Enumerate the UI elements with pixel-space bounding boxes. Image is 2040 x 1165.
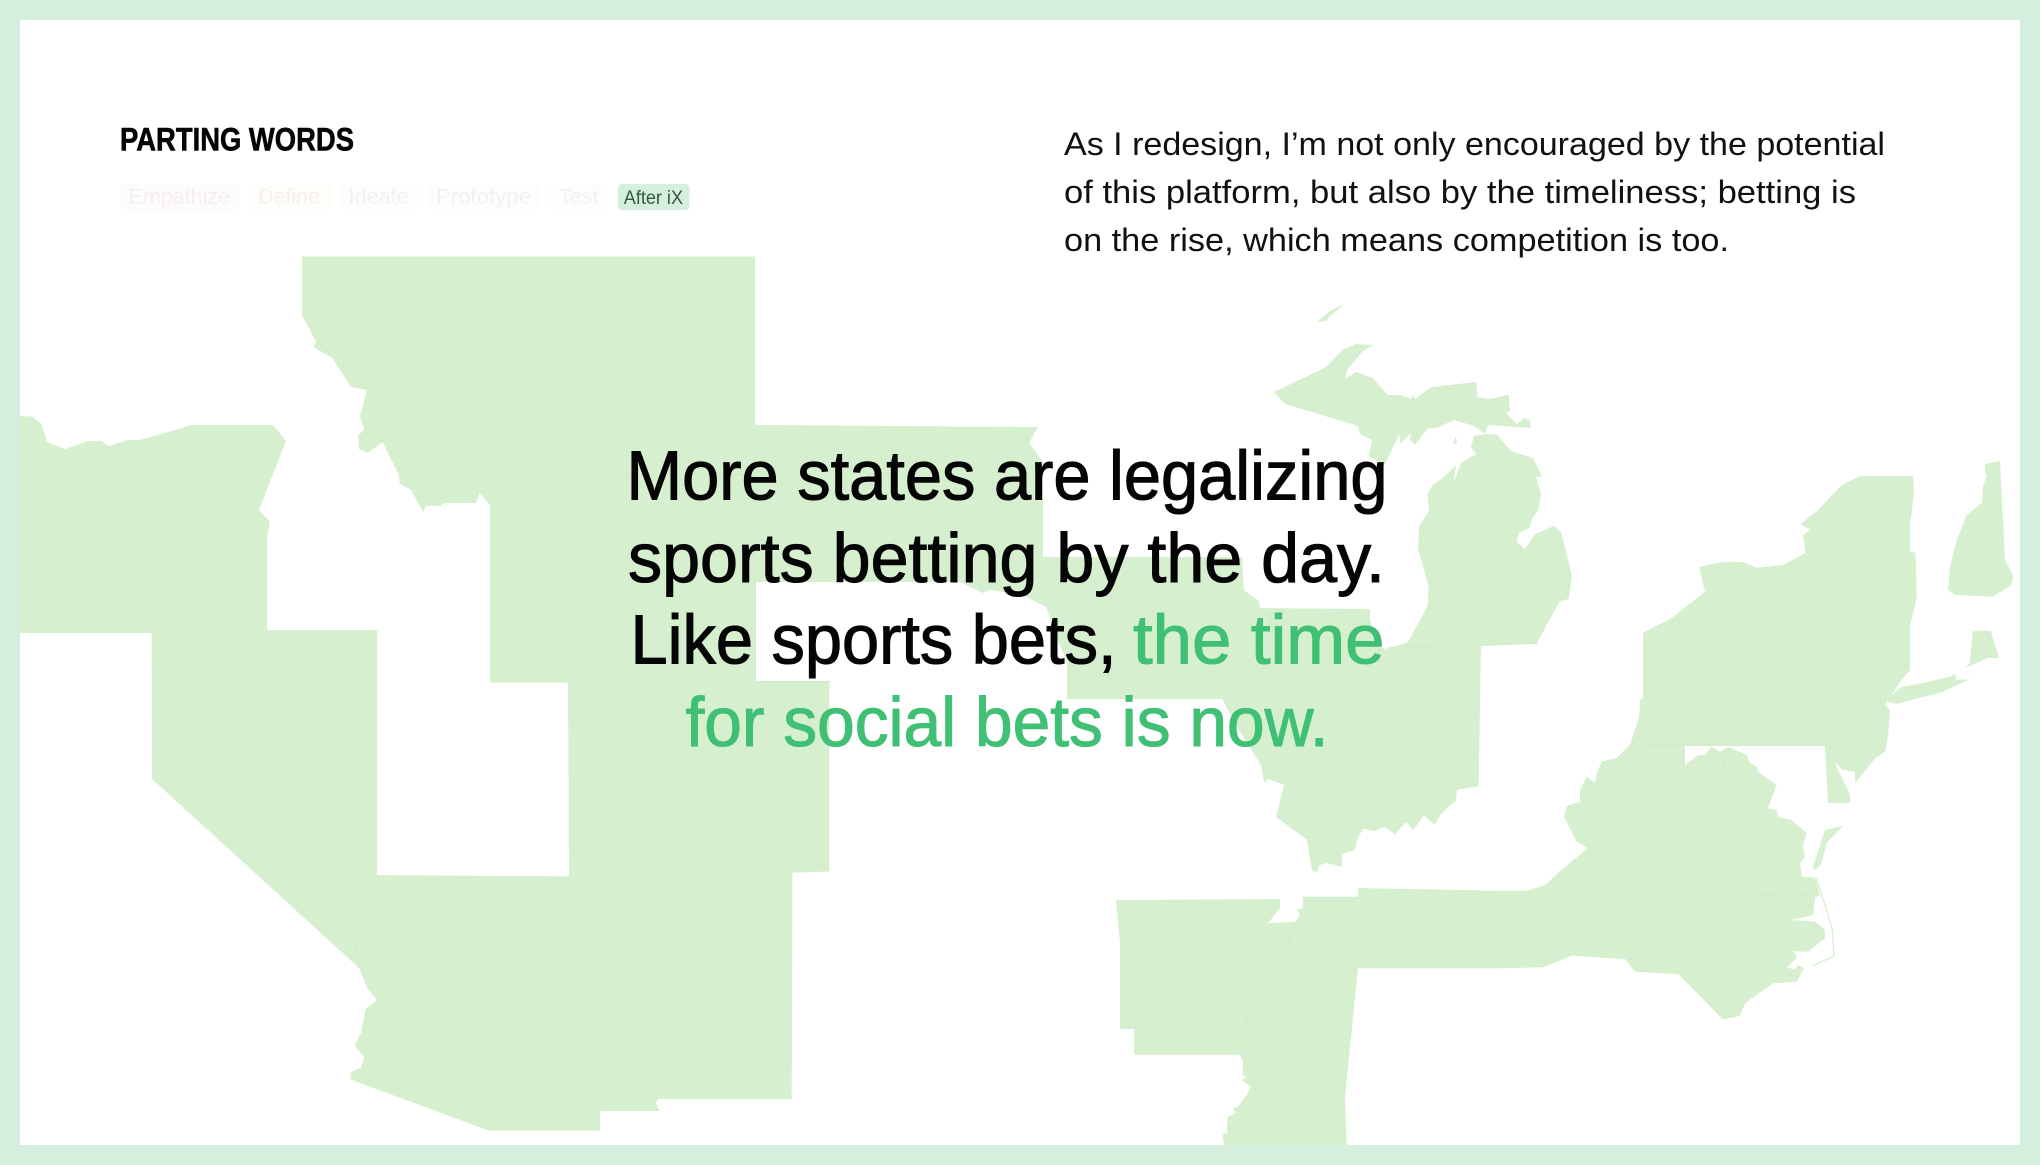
tag: Empathize: Empathize: [129, 185, 230, 208]
state: Rhode Island: [1965, 631, 1999, 668]
state: Arizona: [350, 875, 569, 1131]
tag: Define: [250, 184, 332, 210]
tag: Test: Test: [559, 185, 599, 208]
tag: Prototype: Prototype: [436, 185, 531, 208]
states: Dakota, Iowa, Illinois, Indiana and Michigan lower peninsula: [755, 425, 1572, 872]
headline statement: for social bets is now.: [686, 683, 1328, 761]
intro paragraph: As I redesign, I’m not only encouraged by the potential: [1064, 126, 1885, 162]
state: New Mexico: [567, 873, 792, 1131]
headline statement: More states are legalizing: [626, 436, 1388, 514]
headline statement: sports betting by the day.: [628, 519, 1385, 597]
peninsula: Virginia Eastern Shore: [1813, 826, 1843, 870]
headline statement: [626, 436, 1388, 761]
state: Michigan upper peninsula: [1274, 344, 1531, 465]
state: Colorado: [568, 682, 829, 876]
state: Montana: [302, 256, 755, 512]
intro paragraph: of this platform, but also by the timeliness; betting is: [1064, 174, 1856, 210]
island: Isle Royale: [1317, 304, 1345, 322]
tag: Define: Define: [258, 185, 320, 208]
intro paragraph: [1064, 126, 1885, 258]
tag: After iX: After iX: [624, 188, 683, 209]
state: Nevada: [152, 630, 379, 968]
island: Long Island: [1888, 674, 1970, 704]
tag: Ideate: [340, 184, 418, 210]
state: Wyoming: [490, 475, 756, 683]
headline statement: Like sports bets,: [630, 600, 1116, 678]
island: Outer Banks: [1812, 878, 1834, 966]
state: New Hampshire: [1948, 461, 2013, 597]
heading: Parting Words: PARTING WORDS: [120, 122, 354, 158]
headline statement: the time: [1133, 600, 1384, 678]
state: Oregon: [20, 416, 286, 633]
tag: Test: [550, 184, 608, 210]
map of legalizing states: [20, 256, 2013, 1145]
process tags: [120, 184, 690, 210]
states: New York, Pennsylvania, New Jersey, Virginia, West Virginia, North Carolina, Tennessee, Arkansas, Mississippi: [1116, 476, 1917, 1145]
tag: Ideate: Ideate: [349, 185, 409, 208]
intro paragraph: on the rise, which means competition is too.: [1064, 222, 1729, 258]
island: Lake Michigan islet: [1453, 436, 1457, 445]
